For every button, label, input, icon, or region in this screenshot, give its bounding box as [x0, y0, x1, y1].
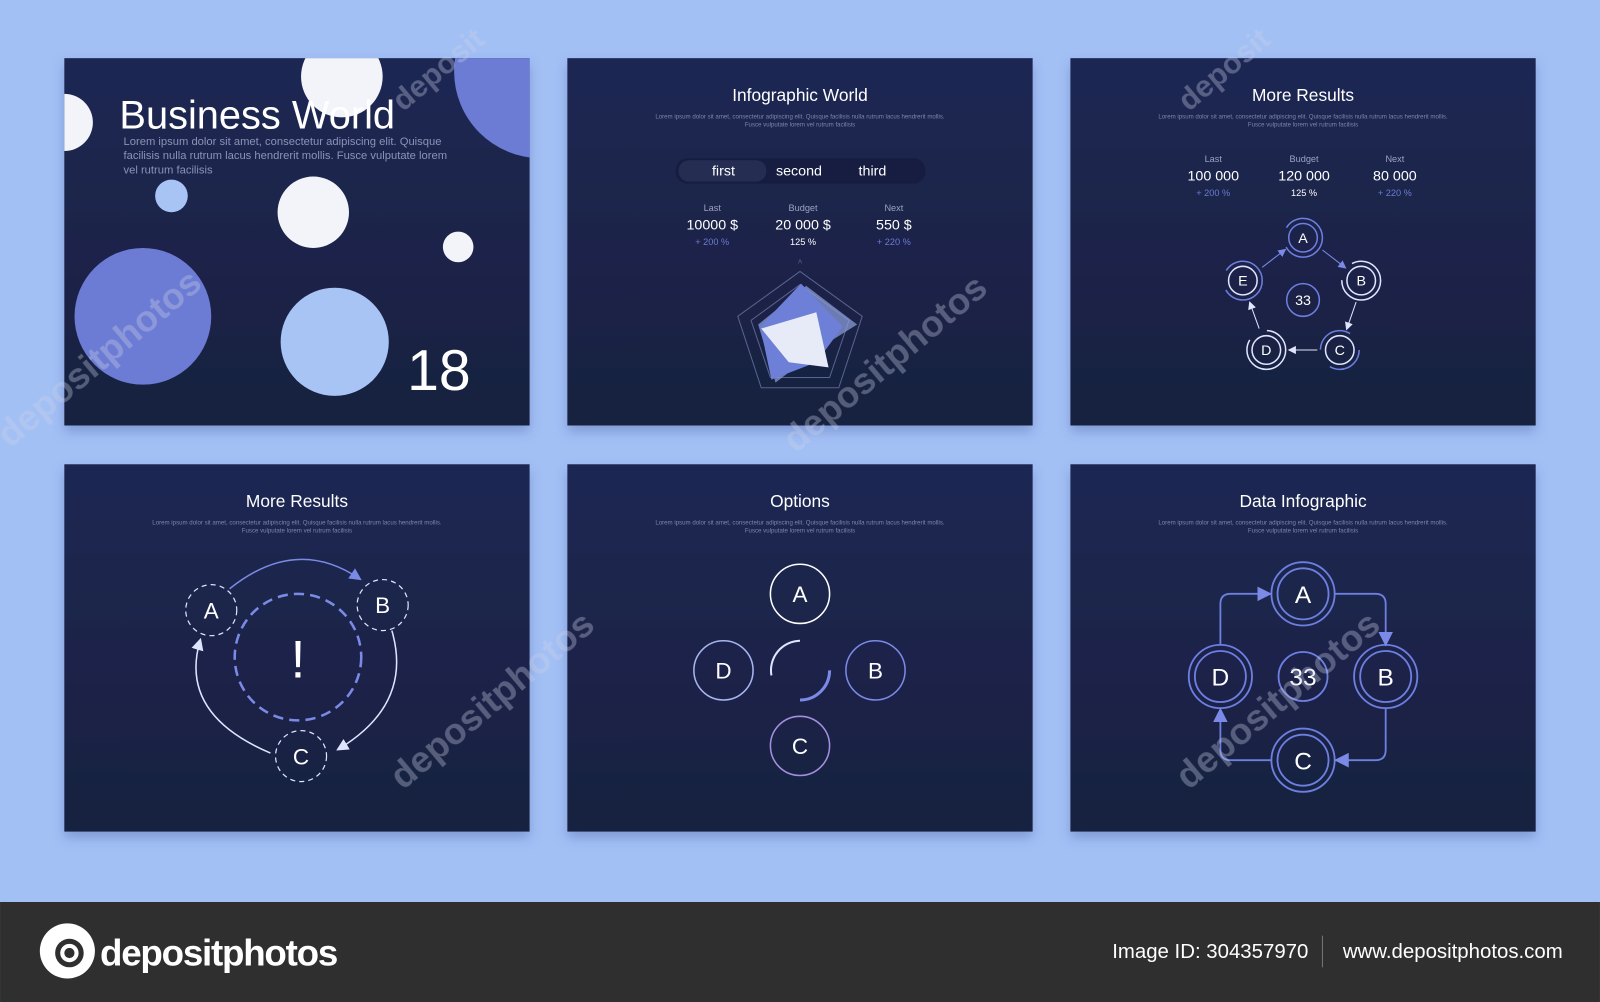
panel: More Results (cycle): D	[1261, 343, 1271, 359]
panel: More Results (A B C): B	[375, 593, 390, 618]
stats: 100 000	[1187, 169, 1239, 185]
panel: More Results (cycle): A	[1298, 231, 1308, 247]
panel: More Results (cycle): C	[1335, 343, 1345, 359]
footer bar	[0, 902, 1600, 1002]
panel: Options: A	[793, 582, 808, 607]
panel: More Results (cycle): Fusce vulputate lorem vel rutrum facilisis	[1248, 122, 1358, 129]
panel: More Results (cycle): 33	[1295, 293, 1311, 309]
stats: 125 %	[1291, 188, 1317, 198]
title: Business World	[119, 94, 395, 138]
stats: Next	[884, 203, 904, 213]
text block: facilisis nulla rutrum lacus hendrerit mollis. Fusce vulputate lorem	[123, 150, 447, 162]
stats: + 200 %	[695, 237, 729, 247]
panel: More Results (cycle): Lorem ipsum dolor sit amet, consectetur adipiscing elit. Quisque facilisis nulla rutrum lacus hendrerit mollis.	[1158, 113, 1448, 120]
logo text: depositphotos	[100, 932, 337, 973]
panel: More Results (cycle): B	[1356, 274, 1366, 290]
panel: Data Infographic: 33	[1289, 665, 1317, 692]
radar chart: A	[798, 258, 803, 265]
tabs: first	[712, 164, 735, 180]
stats: + 200 %	[1196, 188, 1230, 198]
panel: Data Infographic: B	[1378, 665, 1394, 692]
panel: Options: Options	[770, 491, 830, 511]
panel: More Results (A B C): A	[204, 598, 219, 623]
flow diagram	[1189, 562, 1417, 792]
watermark text	[0, 22, 1388, 797]
panel: Options	[567, 464, 1033, 832]
panel: Infographic World: Fusce vulputate lorem vel rutrum facilisis	[745, 122, 855, 129]
panel: More Results (A B C)	[64, 464, 530, 832]
stats: 120 000	[1278, 169, 1330, 185]
stats: Next	[1385, 154, 1405, 164]
panel: More Results (A B C): C	[293, 744, 309, 769]
stats: 10000 $	[686, 218, 738, 234]
stats	[686, 203, 912, 247]
stats: + 220 %	[1378, 188, 1412, 198]
cycle diagram	[1223, 218, 1381, 369]
panel: Data Infographic: D	[1212, 665, 1229, 692]
watermark text: deposit	[386, 22, 491, 118]
panel: Options: D	[715, 659, 732, 684]
tabs: second	[776, 164, 822, 180]
tabs	[676, 158, 926, 184]
stats: 550 $	[876, 218, 912, 234]
image id: Image ID: 304357970	[1112, 941, 1308, 963]
stats	[1187, 154, 1417, 198]
text block: vel rutrum facilisis	[123, 164, 213, 176]
panel: Data Infographic	[1070, 464, 1536, 832]
stats: Budget	[1290, 154, 1319, 164]
stats: + 220 %	[877, 237, 911, 247]
cycle diagram with alert	[186, 559, 408, 782]
panel: More Results (cycle): E	[1238, 274, 1248, 290]
options diagram	[694, 564, 905, 775]
panel: More Results (A B C): More Results	[246, 491, 348, 511]
number 18: 18	[407, 339, 471, 403]
panel: More Results (A B C): !	[291, 631, 305, 690]
watermark text: depositphotos	[1168, 603, 1388, 797]
tabs: third	[859, 164, 886, 180]
panel: More Results (cycle): More Results	[1252, 85, 1354, 105]
panel: Options: C	[792, 734, 808, 759]
stats: 20 000 $	[775, 218, 831, 234]
panel: More Results (cycle)	[1070, 58, 1536, 425]
panel: Data Infographic: Fusce vulputate lorem vel rutrum facilisis	[1248, 528, 1358, 535]
panel: Business World	[60, 58, 534, 436]
panel: Infographic World	[567, 58, 1033, 425]
stats: 125 %	[790, 237, 816, 247]
text block: Lorem ipsum dolor sit amet, consectetur adipiscing elit. Quisque	[123, 136, 442, 148]
watermark text: depositphotos	[382, 603, 602, 797]
panel: Data Infographic: A	[1295, 582, 1312, 609]
heading: Infographic World	[732, 85, 868, 105]
stats: Last	[1205, 154, 1222, 164]
panel: Data Infographic: C	[1294, 748, 1312, 775]
stats: Budget	[789, 203, 818, 213]
panel: Options: B	[868, 659, 883, 684]
watermark text: deposit	[1171, 22, 1277, 118]
panel: Data Infographic: Data Infographic	[1239, 491, 1367, 511]
icon: logo camera	[40, 923, 95, 979]
panel: Data Infographic: Lorem ipsum dolor sit amet, consectetur adipiscing elit. Quisque facilisis nulla rutrum lacus hendrerit mollis.	[1158, 519, 1448, 526]
panel: Infographic World: Lorem ipsum dolor sit amet, consectetur adipiscing elit. Quisque facilisis nulla rutrum lacus hendrerit mollis.	[655, 113, 945, 120]
watermark text: depositphotos	[775, 266, 995, 460]
panel: Options: Lorem ipsum dolor sit amet, consectetur adipiscing elit. Quisque facilisis nulla rutrum lacus hendrerit mollis.	[655, 519, 945, 526]
panel: More Results (A B C): Fusce vulputate lorem vel rutrum facilisis	[242, 528, 352, 535]
panel: More Results (A B C): Lorem ipsum dolor sit amet, consectetur adipiscing elit. Quisque facilisis nulla rutrum lacus hendrerit mollis.	[152, 519, 442, 526]
stats: Last	[704, 203, 721, 213]
radar chart	[738, 258, 862, 388]
stats: 80 000	[1373, 169, 1417, 185]
panel: Options: Fusce vulputate lorem vel rutrum facilisis	[745, 528, 855, 535]
website: www.depositphotos.com	[1342, 941, 1563, 963]
